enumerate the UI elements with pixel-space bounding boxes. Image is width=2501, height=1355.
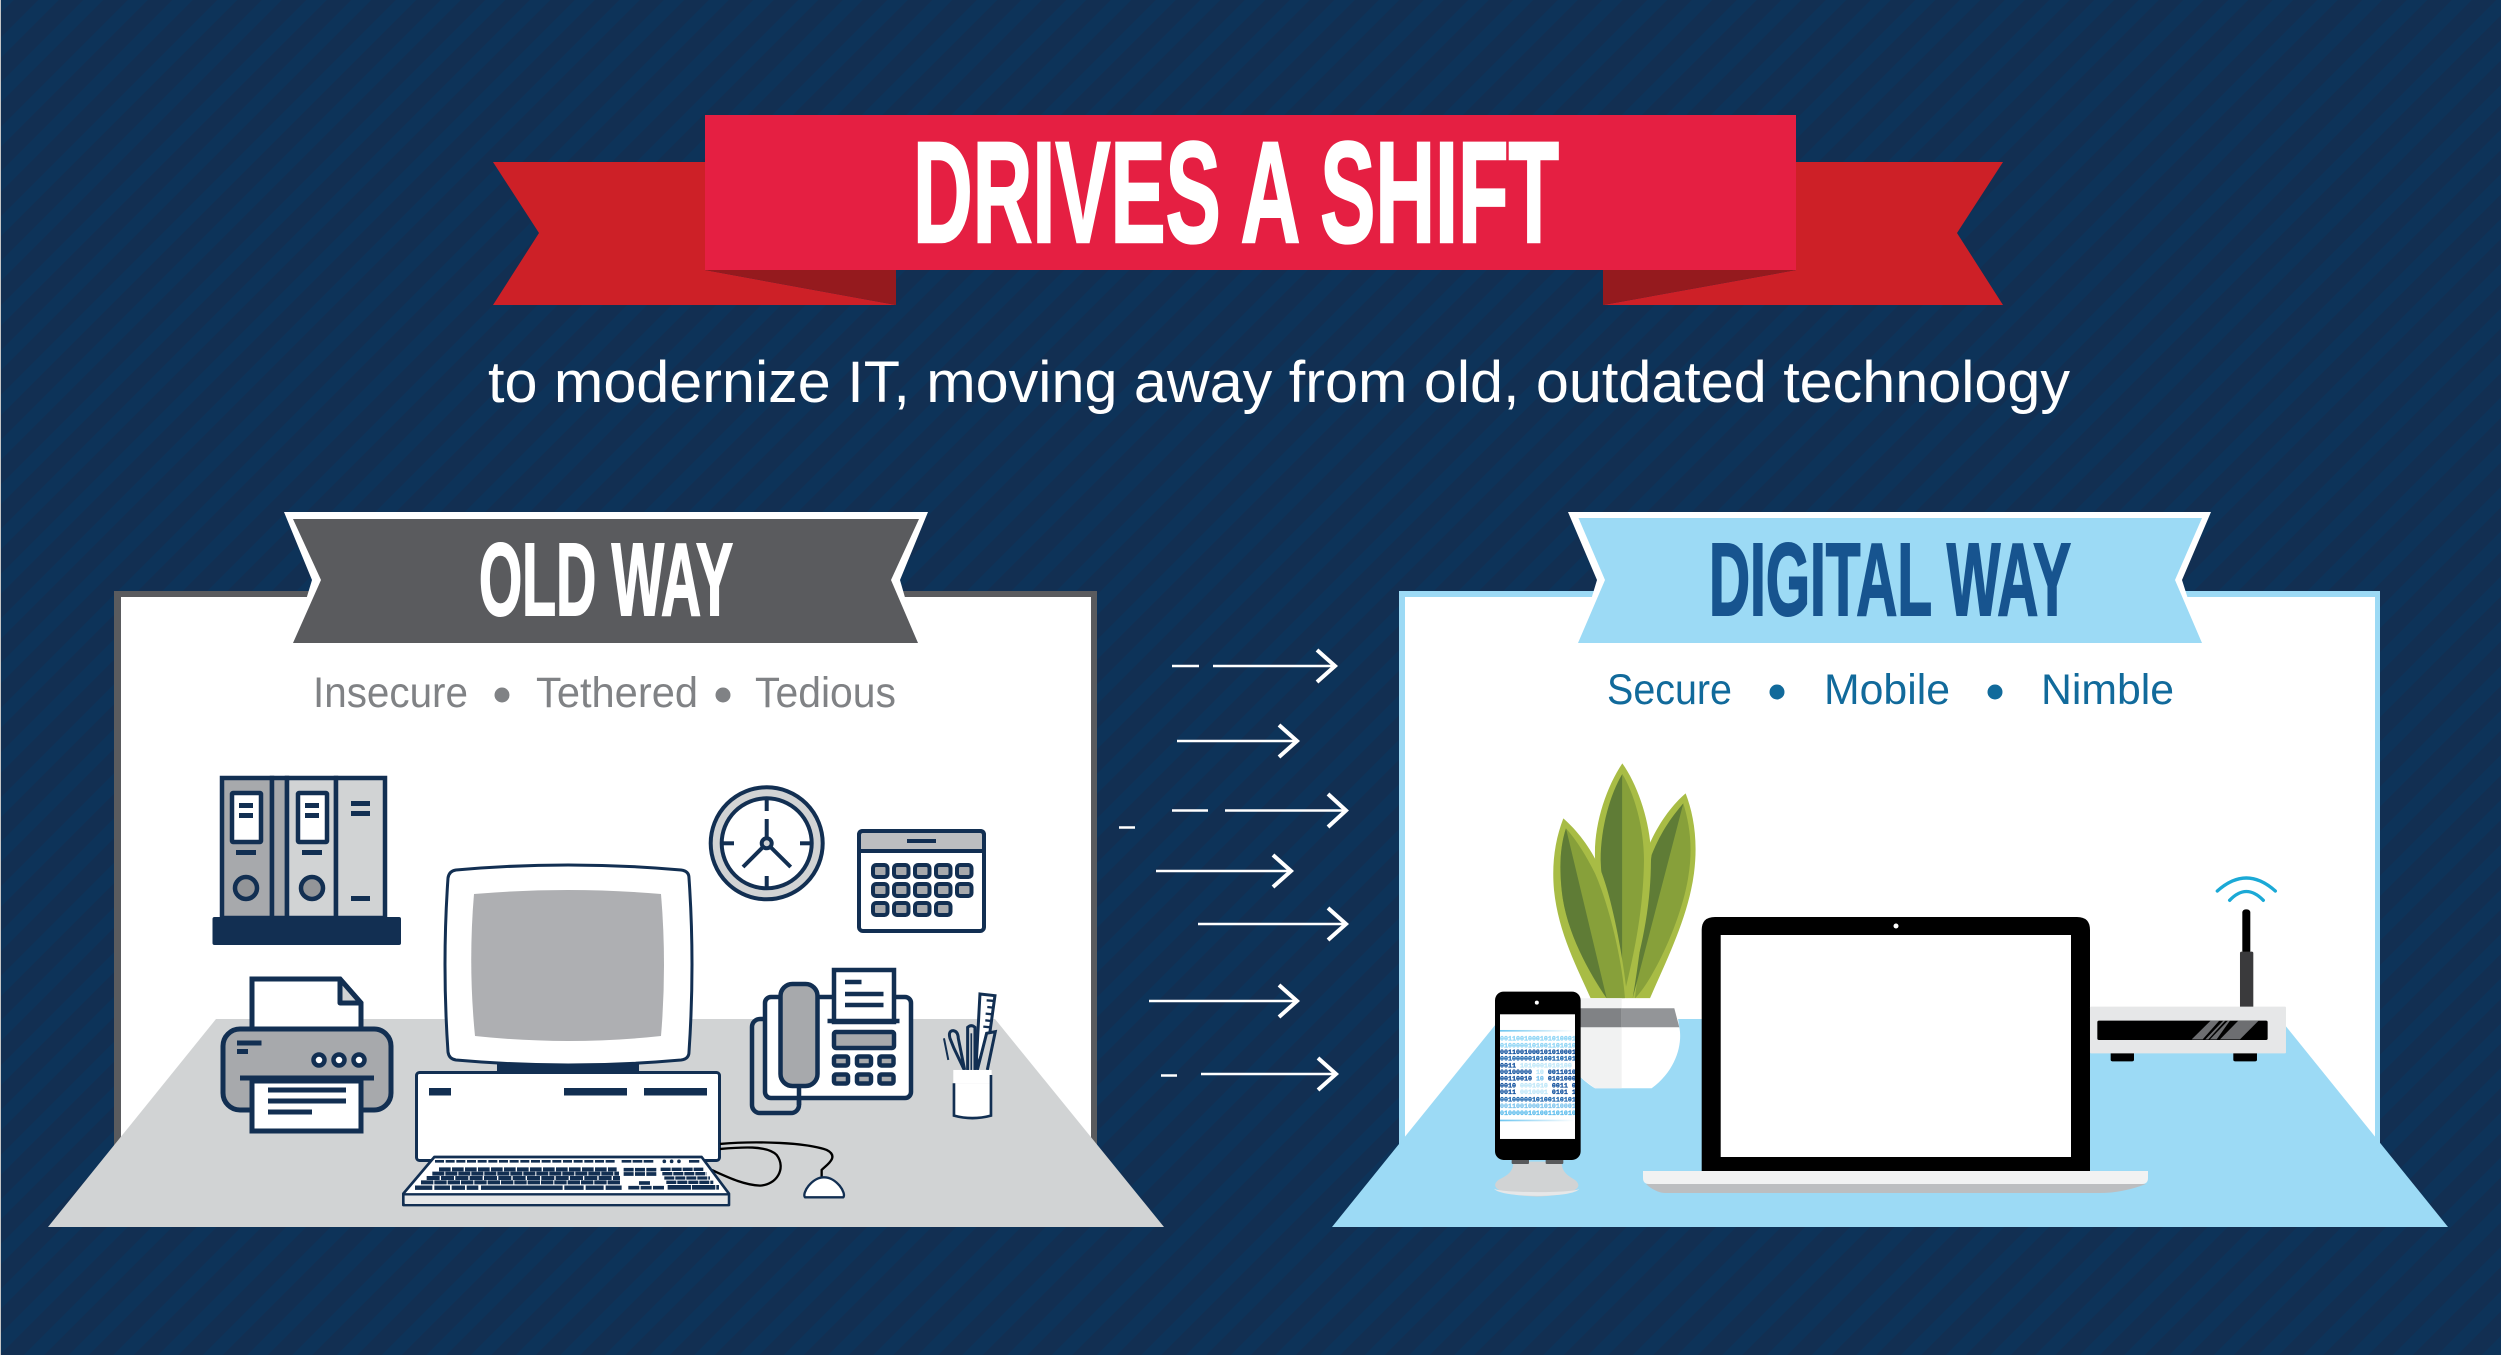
panel frame <box>1399 591 2380 1147</box>
wifi signal <box>2217 878 2275 900</box>
front left leaf <box>1553 818 1627 998</box>
old way ribbon <box>284 512 928 643</box>
icon: fax phone <box>752 970 911 1113</box>
binary data: 0011 1010001010100 1000 <box>1500 1061 1592 1069</box>
binary data: 0011 0010001 0101 1000 <box>1500 1088 1588 1096</box>
icon: wall clock <box>711 787 823 899</box>
binary data: 0010000010100110101010 <box>1500 1095 1588 1103</box>
old way traits: Insecure <box>313 669 468 717</box>
old way traits <box>313 669 896 717</box>
ribbon left tail <box>493 162 896 305</box>
panel: digital way <box>1332 512 2448 1227</box>
binary data <box>1500 1036 1575 1116</box>
ribbon left fold <box>705 270 896 305</box>
title: DRIVES A SHIFT <box>913 112 1559 273</box>
binary data: 0010000010100110101010 <box>1500 1055 1588 1063</box>
icon: laptop <box>1643 917 2148 1193</box>
icon: keyboard <box>403 1157 729 1205</box>
antenna <box>2242 909 2250 954</box>
panel frame <box>114 591 1097 1147</box>
digital way traits: Mobile <box>1824 666 1950 714</box>
icon: mouse cables <box>712 1142 832 1186</box>
binary data: 00100000 10 00110101 <box>1500 1068 1580 1076</box>
digital way traits <box>1607 666 2174 714</box>
phone body <box>1495 992 1581 1160</box>
arrow 4 <box>1156 855 1291 887</box>
binary data: 0100000101001101010100 <box>1500 1041 1588 1049</box>
icon: computer monitor <box>445 865 692 1074</box>
old way traits: Tedious <box>755 669 896 717</box>
back right leaf <box>1627 793 1696 998</box>
arrows <box>1119 650 1346 1090</box>
arrow 2 <box>1177 725 1297 757</box>
icon: printer <box>223 979 391 1131</box>
router body <box>2111 1052 2134 1061</box>
icon: wifi router <box>2090 878 2286 1061</box>
arrow 1 <box>1172 650 1335 682</box>
ribbon right tail <box>1603 162 2003 305</box>
ribbon centre <box>705 115 1796 270</box>
binary data: 00110010 10 01010001 <box>1500 1075 1580 1083</box>
arrow 7 <box>1161 1058 1336 1090</box>
arrow 3 <box>1119 794 1346 828</box>
old desk floor <box>48 1019 1164 1227</box>
icon: mouse <box>804 1177 844 1197</box>
digital way ribbon <box>1568 512 2211 643</box>
digital way traits: Secure <box>1607 666 1732 714</box>
old way traits: Tethered <box>536 669 698 717</box>
icon: desktop tower <box>416 1072 720 1160</box>
pot <box>1580 998 1680 1088</box>
binary data: 0011001000101010001000 <box>1500 1034 1588 1042</box>
digital way heading: DIGITAL WAY <box>1709 522 2071 637</box>
icon: binders on shelf <box>212 778 401 945</box>
phone stand <box>1495 1162 1578 1197</box>
old way heading: OLD WAY <box>479 522 733 637</box>
ribbon right fold <box>1603 270 1796 305</box>
binary data: 0011001000101010001000 <box>1500 1102 1588 1110</box>
binary data: 0100000101001101010100 <box>1500 1109 1588 1117</box>
binary data: 0010 0001010 0011 00101 <box>1500 1081 1592 1089</box>
icon: calendar <box>859 831 984 931</box>
icon: pencil cup <box>944 994 995 1118</box>
panel: old way <box>48 512 1164 1227</box>
centre leaf <box>1595 763 1651 998</box>
digital way traits: Nimble <box>2041 666 2174 714</box>
digital desk floor <box>1332 1019 2448 1227</box>
title ribbon <box>493 112 2003 305</box>
icon: potted plant <box>1553 763 1696 1088</box>
icon: smartphone <box>1494 992 1581 1197</box>
subtitle: to modernize IT, moving away from old, outdated technology <box>488 350 2070 415</box>
binary data: 0011001000101010001000 <box>1500 1048 1588 1056</box>
arrow 5 <box>1198 908 1346 940</box>
arrow 6 <box>1149 985 1297 1017</box>
